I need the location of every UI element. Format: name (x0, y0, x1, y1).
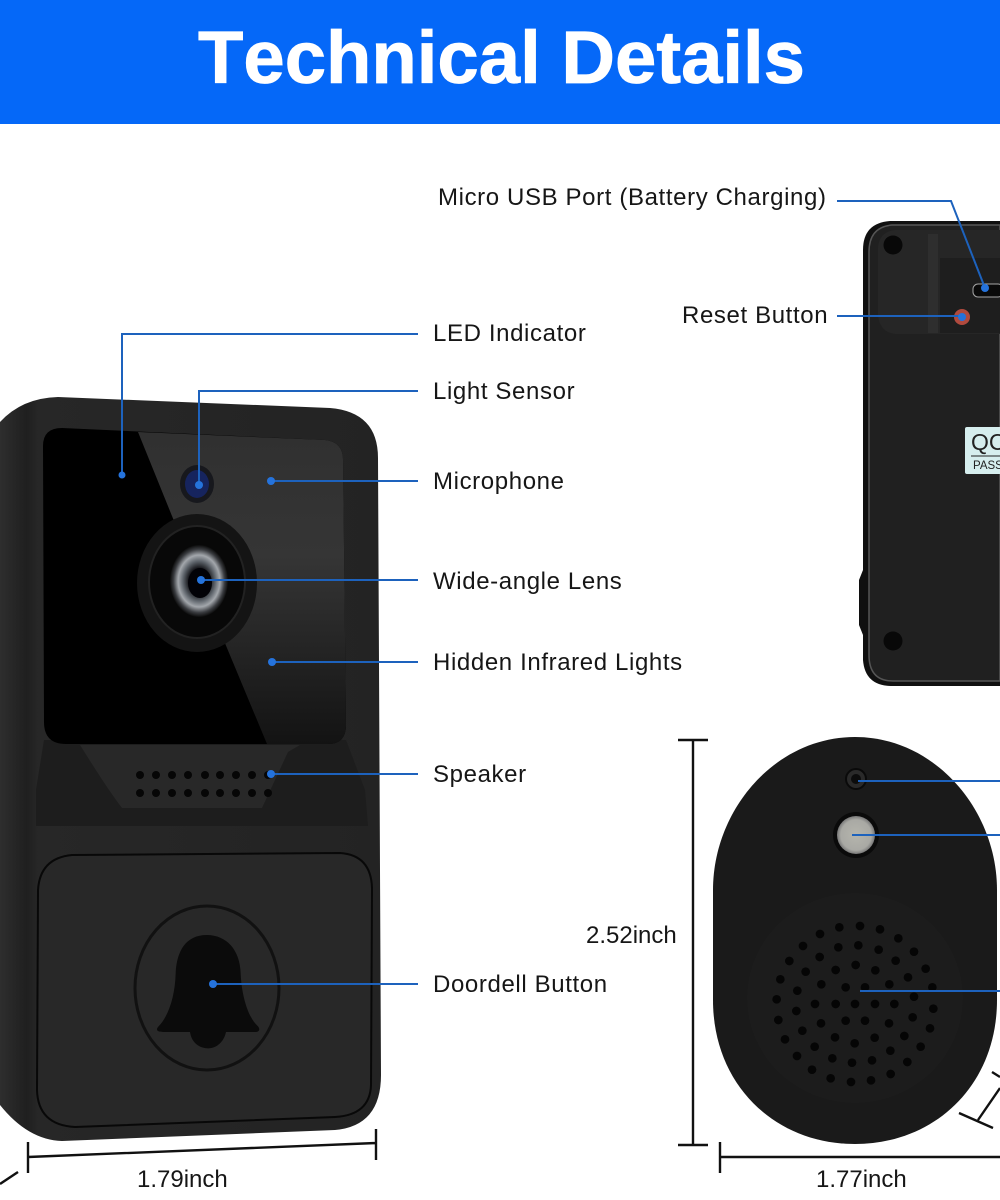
front view doorbell device (0, 397, 381, 1141)
callout: LED Indicator: LED Indicator (433, 320, 586, 347)
icon: bell (157, 935, 259, 1048)
micro USB port (973, 284, 1000, 297)
bell ring (135, 906, 279, 1070)
glass reflection wedge (138, 432, 346, 744)
callout: Light Sensor: Light Sensor (433, 378, 575, 405)
callout: Reset Button: Reset Button (682, 302, 828, 329)
dimension: depth mark chime (959, 1072, 1000, 1128)
back view device (859, 221, 1000, 686)
dimension: 1.77inch width: 1.77inch (816, 1166, 907, 1193)
callout: Hidden Infrared Lights: Hidden Infrared Lights (433, 649, 683, 676)
speaker dome (747, 893, 963, 1103)
chime speaker holes (772, 922, 938, 1086)
light sensor (180, 465, 214, 503)
callout: Micro USB Port (438, 184, 989, 292)
dimension: 1.79inch width: 1.79inch (137, 1166, 228, 1193)
callout: Doorbell Button: Doordell Button (433, 971, 608, 998)
wide-angle lens (137, 514, 257, 652)
callout: Microphone: Microphone (433, 468, 565, 495)
callout: chime speaker line (860, 990, 1000, 992)
callout: chime indicator line (858, 780, 1000, 782)
callout: Hidden Infrared Lights (268, 649, 683, 676)
reset button (954, 309, 970, 325)
speaker bump (36, 740, 368, 826)
dimension: 1.79inch width (28, 1129, 376, 1193)
screws (884, 236, 902, 650)
callout: Wide-angle Lens: Wide-angle Lens (433, 568, 622, 595)
doorbell button panel (37, 853, 372, 1127)
callout: Speaker: Speaker (433, 761, 527, 788)
title banner (0, 0, 1000, 124)
callout: LED Indicator (118, 320, 586, 478)
chime button (833, 812, 879, 858)
QC pass sticker (965, 427, 1000, 474)
battery recess (878, 230, 1000, 334)
back body (859, 221, 1000, 686)
callout: chime button line (852, 834, 1000, 836)
dimension: 2.52inch height (586, 740, 708, 1145)
dimension: 1.77inch width (720, 1142, 1000, 1193)
indicator LED (846, 769, 866, 789)
callout: Reset Button (682, 302, 966, 329)
camera glass panel (43, 428, 346, 744)
speaker holes (136, 771, 272, 797)
callout: Speaker (267, 761, 527, 788)
title: Technical Details (198, 16, 805, 99)
callout: Light Sensor (195, 378, 575, 489)
oval chime device (713, 737, 997, 1144)
callout: Microphone (267, 468, 565, 495)
callout: Doorbell Button (209, 971, 608, 998)
dimension: depth mark front (0, 1172, 18, 1184)
device body (0, 397, 381, 1141)
chime body (713, 737, 997, 1144)
callout: Micro USB Port: Micro USB Port (Battery Charging) (438, 184, 827, 211)
callout: Wide-angle Lens (197, 568, 622, 595)
dimension: 2.52inch height: 2.52inch (586, 922, 677, 949)
